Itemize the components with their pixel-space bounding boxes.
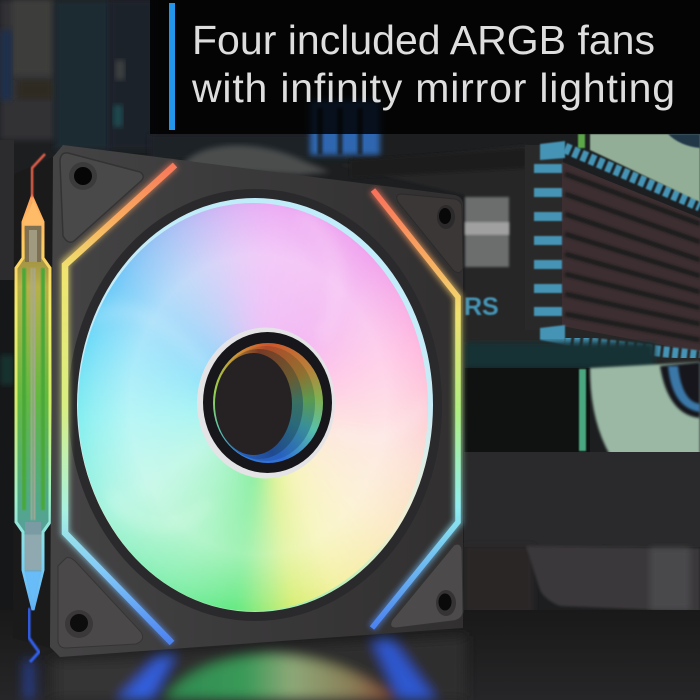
fan front frame [50, 145, 463, 657]
LED strip: right [372, 190, 458, 628]
rainbow fan blades [78, 203, 428, 611]
inner raised chamfer around rotor [68, 189, 442, 621]
corner bracket: top-right [397, 194, 463, 273]
desk surface [0, 610, 700, 700]
hub mirror rings [205, 335, 335, 475]
title: with infinity mirror lighting [191, 65, 675, 111]
title: Four included ARGB fans [192, 17, 655, 63]
blurred background: teal shelf and neighbouring fan [464, 134, 700, 615]
hub black ring [203, 332, 332, 473]
blue accent bar [169, 3, 175, 130]
blurred background: motherboard heatsink: RS [464, 293, 499, 321]
title [191, 17, 675, 111]
fan reflection on desk [26, 636, 465, 700]
corner bracket: top-left [60, 153, 143, 242]
hub outer white ring [197, 328, 335, 478]
fan side edge [13, 154, 53, 662]
LED strip glow [65, 165, 458, 643]
fan blade streaks [94, 220, 325, 522]
corner bracket: bottom-right [391, 544, 463, 628]
title background panel [150, 0, 700, 134]
rotor ring [77, 198, 433, 612]
side light channel [16, 154, 50, 662]
blurred background: motherboard heatsink [340, 141, 700, 365]
LED strip: left [65, 165, 175, 643]
infinity mirror hub [197, 328, 335, 478]
corner bracket: bottom-left [58, 558, 143, 648]
